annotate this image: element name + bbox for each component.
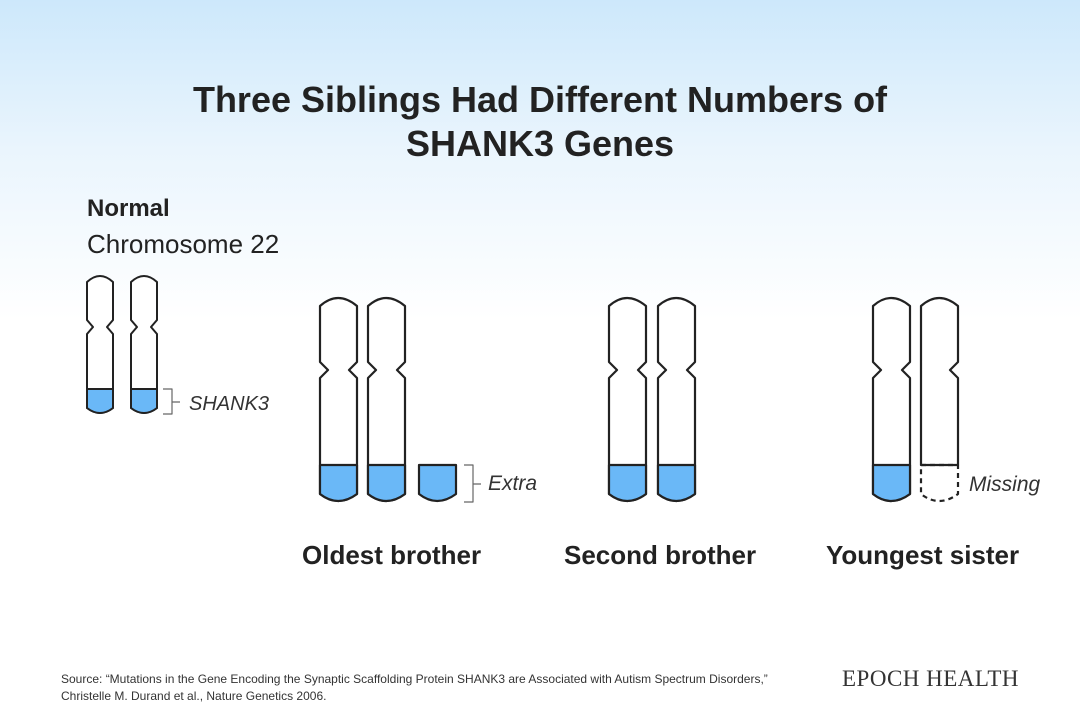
label: extra: Extra [488, 472, 537, 495]
title: Three Siblings Had Different Numbers of [193, 79, 887, 120]
chromosomes: oldest brother [320, 298, 481, 502]
chromosomes: second brother [609, 298, 695, 501]
caption: second brother: Second brother [564, 540, 756, 570]
source text: Source: “Mutations in the Gene Encoding the Synaptic Scaffolding Protein SHANK3 are Associated with Autism Spectrum Disorders,” [61, 672, 768, 686]
chromosomes: youngest sister [873, 298, 958, 501]
label: missing: Missing [969, 473, 1040, 496]
heading: normal: Normal [87, 195, 170, 222]
caption: youngest sister: Youngest sister [826, 540, 1019, 570]
logo: epoch health: EPOCH HEALTH [842, 666, 1019, 691]
caption: oldest brother: Oldest brother [302, 540, 481, 570]
label: SHANK3: SHANK3 [189, 393, 269, 415]
title: SHANK3 Genes [406, 123, 674, 164]
subheading: chromosome 22: Chromosome 22 [87, 229, 279, 259]
title [193, 79, 888, 164]
source text [61, 672, 768, 703]
source text: Christelle M. Durand et al., Nature Genetics 2006. [61, 689, 326, 703]
normal pair [87, 276, 180, 414]
